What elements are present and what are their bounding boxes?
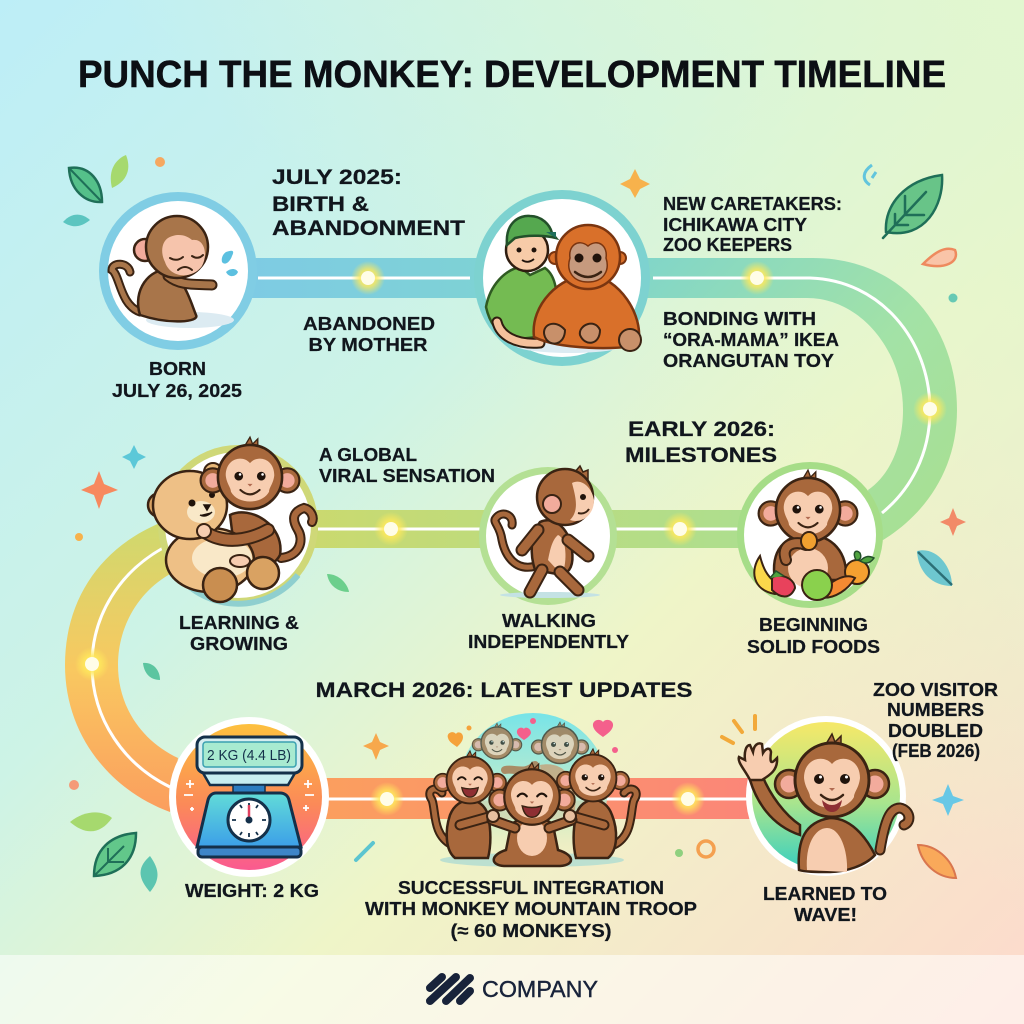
text: zoo visitors: (FEB 2026): [892, 740, 980, 761]
label: integration: (≈ 60 MONKEYS): [450, 920, 612, 941]
panel: birth: [99, 192, 257, 401]
text: viral sensation: A GLOBAL: [319, 444, 417, 465]
label: walking: WALKING: [502, 610, 596, 631]
text: bonding: ORANGUTAN TOY: [663, 350, 835, 371]
text: viral sensation: VIRAL SENSATION: [319, 465, 495, 486]
label: learning and growing: [179, 612, 299, 654]
icon: company logo: [430, 977, 470, 1001]
heading: early 2026: MILESTONES: [625, 443, 777, 467]
label: waving: WAVE!: [794, 904, 857, 925]
label: born: [112, 358, 242, 401]
panel: caretakers: [474, 190, 650, 366]
text: bonding: BONDING WITH: [663, 308, 816, 329]
label: born: JULY 26, 2025: [112, 380, 242, 401]
text: new caretakers: ZOO KEEPERS: [663, 234, 792, 255]
heading: July 2025: ABANDONMENT: [272, 216, 465, 240]
panel: learning and growing: [148, 437, 318, 654]
text: bonding: “ORA-MAMA” IKEA: [663, 329, 839, 350]
text: viral sensation: [319, 444, 495, 486]
footer: [0, 955, 1024, 1024]
panel: troop: [365, 713, 697, 941]
label: waving: [763, 883, 887, 925]
label: walking: INDEPENDENTLY: [468, 631, 630, 652]
label: integration: SUCCESSFUL INTEGRATION: [398, 877, 664, 898]
label: solid foods: SOLID FOODS: [747, 636, 880, 657]
icon: waving monkey: [722, 716, 909, 876]
heading: July 2025: BIRTH &: [272, 192, 369, 216]
icon: monkey troop: [430, 713, 636, 867]
text: zoo visitors: NUMBERS: [887, 699, 984, 720]
glowing timeline nodes: [75, 261, 947, 816]
icon: monkey hugging teddy bear: [148, 437, 318, 605]
label: walking: [468, 610, 630, 652]
icon: walking monkey: [479, 466, 617, 605]
text: zoo visitors: [873, 679, 998, 761]
heading: early 2026: EARLY 2026:: [628, 417, 775, 441]
text: new caretakers: ICHIKAWA CITY: [663, 214, 808, 235]
label: abandoned: ABANDONED: [303, 313, 435, 334]
label: born: BORN: [149, 358, 206, 379]
label: waving: LEARNED TO: [763, 883, 887, 904]
label: learning and growing: GROWING: [190, 633, 288, 654]
icon: keeper and orangutan toy: [474, 190, 650, 366]
label: integration: [365, 877, 697, 941]
company name: COMPANY: [482, 976, 598, 1002]
heading: march 2026: MARCH 2026: LATEST UPDATES: [316, 678, 692, 702]
heading: early 2026: [625, 417, 777, 467]
label: abandoned: BY MOTHER: [308, 334, 428, 355]
timeline path: [65, 258, 957, 819]
text: bonding: [663, 308, 839, 371]
text: zoo visitors: ZOO VISITOR: [873, 679, 998, 700]
icon: sad baby monkey: [99, 192, 257, 350]
label: solid foods: [747, 614, 880, 657]
label: solid foods: BEGINNING: [759, 614, 868, 635]
icon: weighing scale: 2 KG (4.4 LB): [207, 747, 291, 764]
panel: walking: [468, 466, 630, 652]
panel: weight: [169, 717, 329, 901]
label: abandoned: [303, 313, 435, 355]
label: integration: WITH MONKEY MOUNTAIN TROOP: [365, 898, 697, 919]
panel: waving: [722, 716, 909, 925]
label: weight: WEIGHT: 2 KG: [185, 880, 319, 901]
heading: July 2025: [272, 165, 465, 240]
text: new caretakers: NEW CARETAKERS:: [663, 193, 842, 214]
heading: July 2025: JULY 2025:: [272, 165, 402, 189]
decorative leaves and sparkles: [63, 155, 966, 892]
panel: solid foods: [737, 462, 883, 657]
icon: monkey eating fruit: [737, 462, 883, 608]
label: learning and growing: LEARNING &: [179, 612, 299, 633]
title: PUNCH THE MONKEY: DEVELOPMENT TIMELINE: [78, 54, 946, 96]
text: zoo visitors: DOUBLED: [888, 720, 983, 741]
icon: weighing scale: [169, 717, 329, 877]
text: new caretakers: [663, 193, 842, 255]
